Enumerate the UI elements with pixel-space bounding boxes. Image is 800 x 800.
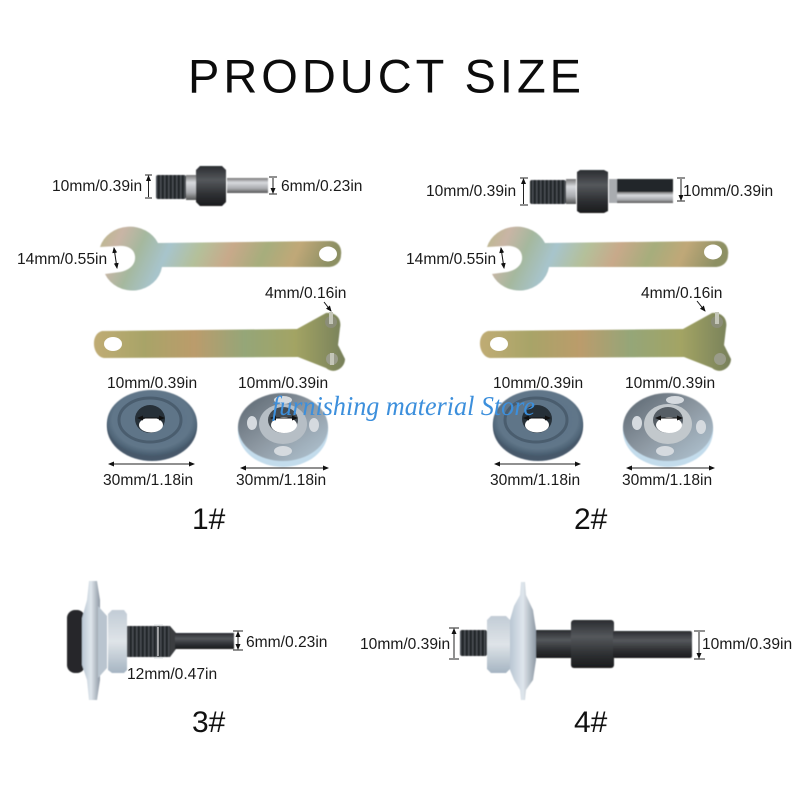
flange nut 1 silver: 30mm/1.18in <box>236 472 326 489</box>
arbor 1 with dimensions: 6mm/0.23in <box>281 178 362 195</box>
panel: item 4: 10mm/0.39in <box>702 636 792 653</box>
panel: item 3: 12mm/0.47in <box>127 666 217 683</box>
arbor 1 with dimensions: 10mm/0.39in <box>52 178 142 195</box>
panel: item 4 <box>360 582 792 739</box>
panel: item 3: 6mm/0.23in <box>246 634 327 651</box>
panel: set 2 <box>406 170 773 536</box>
arbor 2 with dimensions: 10mm/0.39in <box>426 183 516 200</box>
flange nut 2 silver: 10mm/0.39in <box>625 375 715 392</box>
open-end wrench 1 <box>17 227 341 291</box>
arbor 2 with dimensions <box>426 170 773 213</box>
flange disc 1 dark <box>103 375 197 489</box>
panel: item 3 <box>67 581 327 739</box>
flange disc 2 dark: 10mm/0.39in <box>493 375 583 392</box>
panel: item 4: 10mm/0.39in <box>360 636 450 653</box>
label 4#: 4# <box>574 706 608 739</box>
pin wrench 2 <box>480 301 731 371</box>
flange disc 1 dark: 30mm/1.18in <box>103 472 193 489</box>
label 1#: 1# <box>192 503 226 536</box>
pin wrench 1: 4mm/0.16in <box>265 285 346 302</box>
label 3#: 3# <box>192 706 226 739</box>
panel: set 1 <box>17 166 362 536</box>
watermark: furnishing material Store <box>272 391 535 421</box>
flange nut 1 silver: 10mm/0.39in <box>238 375 328 392</box>
label 2#: 2# <box>574 503 608 536</box>
flange disc 2 dark: 30mm/1.18in <box>490 472 580 489</box>
pin wrench 2 dimension: 4mm/0.16in <box>641 285 722 302</box>
flange nut 2 silver: 30mm/1.18in <box>622 472 712 489</box>
flange disc 2 dark <box>490 375 583 489</box>
flange disc 1 dark: 10mm/0.39in <box>107 375 197 392</box>
arbor 1 with dimensions <box>52 166 362 206</box>
open-end wrench 2 <box>487 227 728 291</box>
title: PRODUCT SIZE <box>188 50 581 102</box>
arbor 2 with dimensions: 10mm/0.39in <box>683 183 773 200</box>
wrench 2 dimension: 14mm/0.55in <box>406 251 496 268</box>
flange nut 2 silver <box>622 375 715 489</box>
pin wrench 1 <box>94 285 346 371</box>
open-end wrench 1: 14mm/0.55in <box>17 251 107 268</box>
flange nut 1 silver <box>236 375 328 489</box>
